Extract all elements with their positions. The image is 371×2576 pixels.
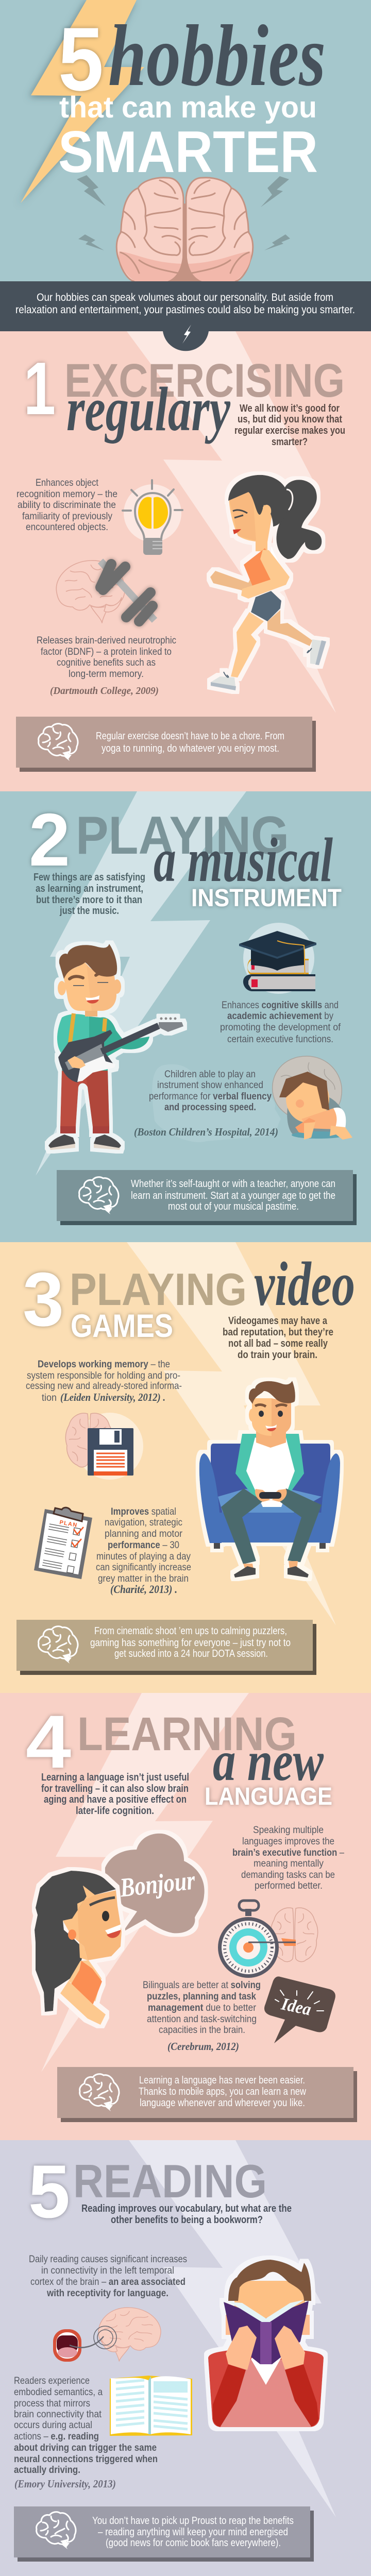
icon: open book — [110, 2376, 192, 2436]
intro text: us, but did you know that — [238, 414, 342, 425]
text: working memory: system responsible for holding and pro- — [27, 1370, 180, 1381]
heading: PLAYING — [76, 806, 289, 866]
callout: get sucked into a 24 hour DOTA session. — [114, 1648, 268, 1659]
text: verbal fluency: Children able to play an — [164, 1069, 256, 1080]
text: object recognition: encountered objects. — [26, 521, 108, 533]
intro text: Reading improves our vocabulary, but what are the — [81, 2203, 292, 2214]
text: BDNF: (Dartmouth College, 2009) — [50, 685, 159, 697]
heading: READING — [73, 2156, 267, 2208]
text: embodied semantics: brain connectivity that — [14, 2409, 102, 2420]
intro text: do train your brain. — [238, 1349, 317, 1361]
heading: LEARNING — [77, 1708, 297, 1760]
text: cognitive skills — [220, 999, 341, 1045]
heading: INSTRUMENT — [191, 885, 342, 912]
text: verbal fluency — [134, 1069, 278, 1138]
lightning bolt background — [21, 0, 144, 203]
intro text: not all bad – some really — [228, 1338, 328, 1349]
icon: stopwatch and brain — [218, 1901, 318, 1978]
heading: a new — [213, 1730, 324, 1792]
heading — [28, 2149, 267, 2233]
text: embodied semantics — [14, 2375, 158, 2490]
text: bilinguals: puzzles, planning and task — [147, 1991, 256, 2002]
text: daily reading: with receptivity for language. — [46, 2287, 168, 2299]
icon: brain — [116, 178, 253, 281]
intro band — [0, 281, 371, 331]
text: embodied semantics: neural connections triggered when — [14, 2453, 158, 2465]
illustration: speech blob, baby and brain — [152, 1056, 352, 1142]
icon: idea bubble — [264, 1976, 335, 2043]
illustration: woman speaking — [35, 1871, 122, 2025]
text: bilinguals: management due to better — [148, 2002, 256, 2013]
intro text: but there’s more to it than — [36, 894, 142, 906]
callout: yoga to running, do whatever you enjoy most. — [102, 742, 279, 754]
text: embodied semantics: process that mirrors — [14, 2398, 90, 2409]
illustration: reader with book — [208, 2260, 324, 2427]
text: embodied semantics: Readers experience — [14, 2375, 90, 2386]
text: executive function: languages improves the — [242, 1836, 334, 1847]
panel: 2 playing a musical instrument — [0, 791, 371, 1242]
callout: Thanks to mobile apps, you can learn a new — [139, 2086, 306, 2097]
text: spatial navigation — [96, 1506, 191, 1596]
intro text: later-life cognition. — [76, 1805, 154, 1817]
heading: 4 — [26, 1700, 71, 1784]
text: working memory — [26, 1359, 182, 1403]
title — [58, 7, 326, 185]
text: bilinguals — [143, 1979, 261, 2053]
text: cognitive skills: Enhances cognitive skills and — [222, 999, 339, 1011]
callout: gaming has something for everyone – just try not to — [90, 1637, 291, 1649]
icon: brain and floppy disk — [65, 1413, 143, 1480]
text: spatial navigation: minutes of playing a day — [96, 1551, 191, 1562]
panel: 5 reading — [0, 2140, 371, 2576]
intro text — [223, 1315, 333, 1361]
intro text: aging and have a positive effect on — [44, 1794, 187, 1805]
heading: regulary — [66, 375, 231, 444]
intro text: for travelling – it can also slow brain — [41, 1783, 189, 1794]
icon: brain — [39, 724, 78, 761]
text: object recognition: recognition memory – the — [16, 488, 117, 500]
text: embodied semantics: about driving can trigger the same — [14, 2442, 157, 2453]
text: executive function: demanding tasks can be — [241, 1869, 335, 1880]
heading — [26, 1700, 332, 1810]
speech bubble: Bonjour — [118, 1866, 197, 1903]
intro text: other benefits to being a bookworm? — [111, 2214, 263, 2226]
intro text — [234, 403, 345, 448]
text: verbal fluency: performance for verbal fluency — [149, 1091, 272, 1102]
icon: brain — [79, 1177, 119, 1214]
text: spatial navigation: performance – 30 — [108, 1539, 179, 1551]
icon: brain — [37, 2512, 76, 2549]
heading — [24, 347, 345, 444]
text: cognitive skills: certain executive functions. — [227, 1033, 333, 1045]
icon: brain with dumbbell — [56, 561, 155, 623]
callout: language whenever and wherever you like. — [140, 2097, 305, 2109]
text: executive function: Speaking multiple — [253, 1824, 324, 1836]
text: cognitive skills: academic achievement by — [227, 1010, 333, 1022]
text: bilinguals: attention and task-switching — [147, 2013, 257, 2025]
text: verbal fluency: and processing speed. — [164, 1101, 256, 1113]
panel: 3 playing video games — [0, 1242, 371, 1693]
intro band: Our hobbies can speak volumes about our personality. But aside from — [37, 292, 333, 303]
text: spatial navigation: can significantly increase — [96, 1562, 191, 1573]
intro text — [41, 1772, 189, 1817]
text: verbal fluency: instrument show enhanced — [157, 1079, 263, 1091]
text: embodied semantics: actions – e.g. reading — [14, 2431, 99, 2442]
icon: clipboard plan — [34, 1507, 92, 1579]
text: working memory: tion — [42, 1392, 57, 1403]
intro text: Videogames may have a — [228, 1315, 328, 1327]
icon: brain — [80, 2074, 119, 2111]
text: bilinguals: (Cerebrum, 2012) — [167, 2040, 239, 2053]
callout — [16, 1620, 316, 1675]
callout — [16, 717, 316, 772]
text: embodied semantics: embodied semantics, a — [14, 2386, 103, 2398]
text: verbal fluency: (Boston Children’s Hospital, 2014) — [134, 1126, 278, 1138]
callout: From cinematic shoot ’em ups to calming puzzlers, — [94, 1625, 287, 1637]
text: object recognition: Enhances object — [36, 477, 98, 488]
text: BDNF: long-term memory. — [69, 668, 144, 680]
heading: LANGUAGE — [205, 1783, 332, 1810]
callout — [57, 2067, 357, 2122]
panel: 4 learning a new language — [0, 1693, 371, 2140]
title: 5 — [58, 9, 104, 110]
text: executive function: brain’s executive function – — [232, 1847, 344, 1858]
intro text: just the music. — [59, 905, 119, 917]
text: working memory: Develops working memory – the — [38, 1359, 170, 1370]
text: object recognition: ability to discriminate the — [18, 499, 116, 511]
speech bubble — [105, 1834, 205, 1933]
text: BDNF: factor (BDNF) – a protein linked to — [41, 646, 172, 657]
title: that can make you — [59, 91, 317, 124]
icon: bolt badge — [163, 325, 209, 351]
intro text: bad reputation, but they’re — [223, 1327, 333, 1338]
text: executive function: performed better. — [255, 1880, 323, 1891]
icon: light bulb with brain — [123, 480, 182, 555]
text: daily reading — [29, 2253, 187, 2299]
callout: most out of your musical pastime. — [168, 1200, 299, 1212]
text: daily reading: cortex of the brain – an area associated — [30, 2276, 185, 2287]
intro text: We all know it’s good for — [240, 403, 340, 414]
illustration: guitarist — [48, 944, 183, 1150]
text: BDNF: cognitive benefits such as — [57, 657, 156, 668]
text: spatial navigation: planning and motor — [105, 1528, 182, 1539]
callout — [14, 2506, 314, 2562]
text: daily reading: Daily reading causes significant increases — [29, 2253, 187, 2265]
icon: brain — [39, 1626, 78, 1664]
text: embodied semantics: actually driving. — [14, 2464, 80, 2476]
panel: header — [0, 0, 371, 331]
heading — [29, 798, 342, 912]
text: BDNF — [37, 635, 176, 697]
callout: (good news for comic book fans everywhere). — [106, 2537, 281, 2549]
callout: – reading anything will keep your mind energised — [98, 2526, 288, 2538]
text: spatial navigation: (Charité, 2013) . — [110, 1583, 177, 1596]
panel: 1 exercising regularly — [0, 325, 371, 791]
text: daily reading: in connectivity in the left temporal — [41, 2265, 174, 2276]
icon: graduation cap and books — [239, 923, 316, 994]
heading: 5 — [28, 2149, 70, 2233]
heading: GAMES — [71, 1308, 173, 1344]
text: executive function — [232, 1824, 344, 1891]
intro text — [81, 2203, 292, 2226]
icon: small bolts around the brain — [77, 175, 290, 250]
text: executive function: meaning mentally — [254, 1858, 324, 1869]
text: working memory: cessing new and already-stored informa- — [26, 1380, 182, 1392]
intro text: as learning an instrument, — [36, 883, 143, 894]
text: spatial navigation: grey matter in the brain — [98, 1573, 189, 1584]
text: object recognition: familiarity of previously — [22, 511, 112, 522]
intro text — [33, 872, 145, 917]
title: SMARTER — [58, 120, 318, 185]
heading: 2 — [29, 798, 70, 882]
text: embodied semantics: (Emory University, 2013) — [14, 2478, 116, 2490]
intro text: smarter? — [272, 436, 308, 448]
text: embodied semantics: occurs during actual — [14, 2419, 92, 2431]
text: spatial navigation: Improves spatial — [111, 1506, 176, 1517]
callout: Regular exercise doesn’t have to be a chore. From — [96, 730, 284, 742]
heading: 1 — [24, 347, 56, 430]
icon: idea bubble: Idea — [279, 1994, 313, 2020]
illustration: gamer in armchair — [199, 1381, 340, 1578]
heading: PLAYING — [70, 1264, 247, 1315]
icon: clipboard plan: PLAN — [59, 1519, 77, 1529]
heading — [23, 1249, 355, 1344]
text: bilinguals: capacities in the brain. — [159, 2024, 245, 2036]
text: BDNF: Releases brain-derived neurotrophic — [37, 635, 176, 646]
intro text: Learning a language isn’t just useful — [41, 1772, 189, 1783]
text: working memory: (Leiden University, 2012) . — [60, 1391, 165, 1403]
text: spatial navigation: navigation, strategic — [105, 1517, 182, 1528]
illustration: runner — [210, 475, 326, 690]
intro text: Few things are as satisfying — [33, 872, 145, 883]
callout: You don’t have to pick up Proust to reap the benefits — [92, 2515, 294, 2527]
intro text: regular exercise makes you — [234, 425, 345, 436]
text: bilinguals: Bilinguals are better at solving — [143, 1979, 261, 1991]
text: cognitive skills: promoting the development of — [220, 1022, 341, 1033]
callout: Learning a language has never been easier. — [139, 2074, 305, 2086]
callout — [57, 1170, 357, 1225]
icon: mouth and brain — [53, 2308, 161, 2362]
heading: 3 — [23, 1257, 64, 1342]
text: object recognition — [16, 477, 117, 533]
